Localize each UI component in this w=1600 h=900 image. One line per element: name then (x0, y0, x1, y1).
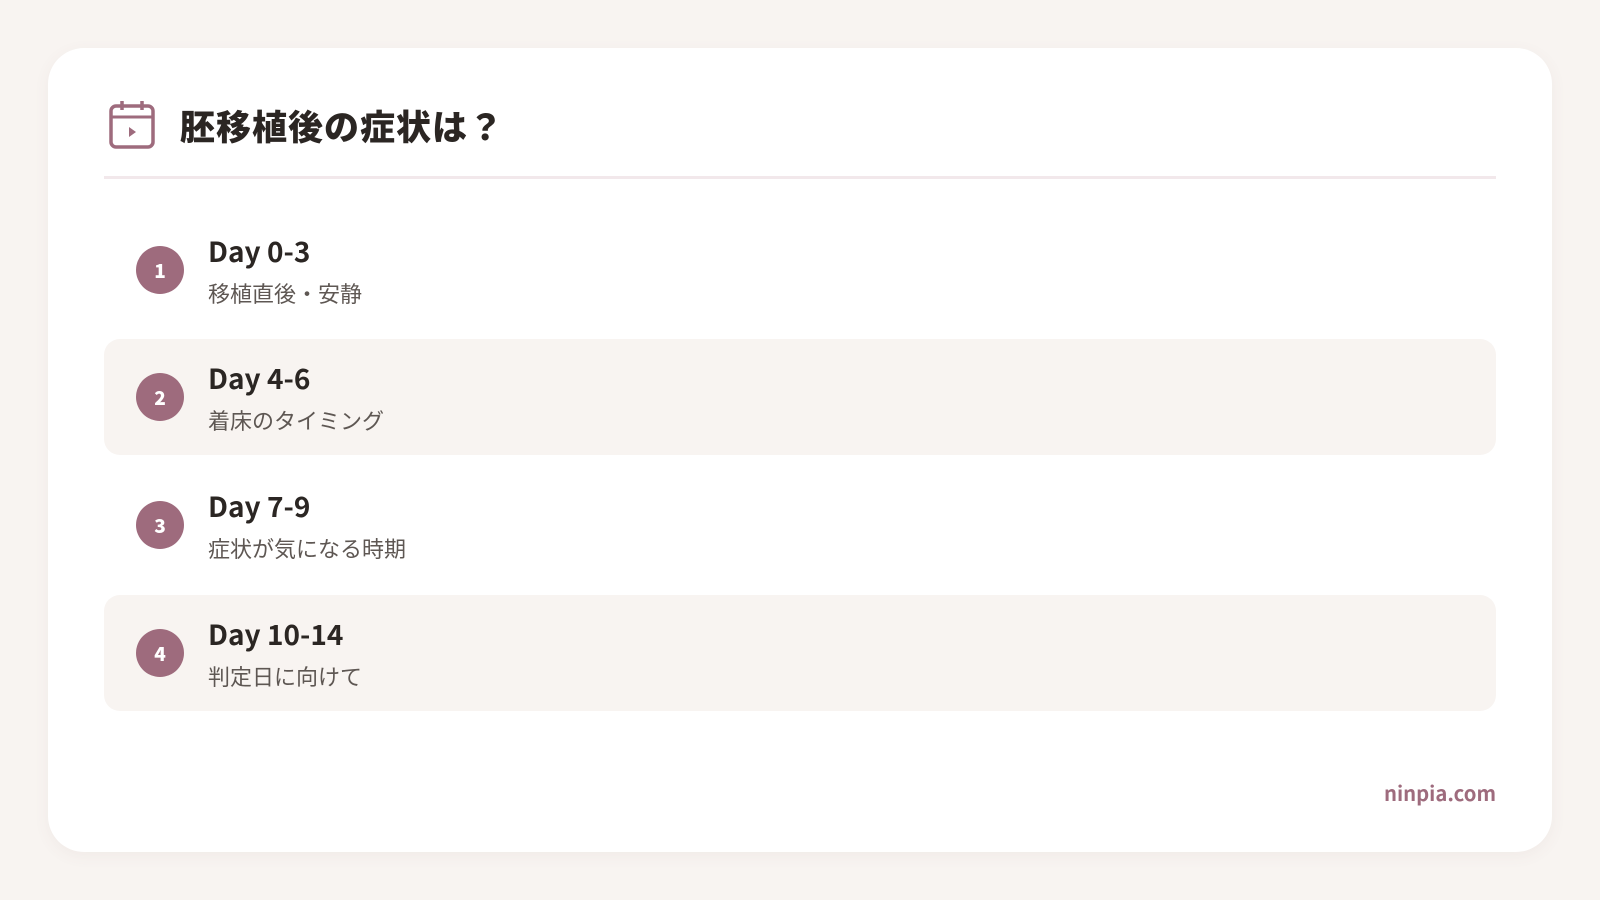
row 1: 1 (154, 256, 166, 284)
title: 胚移植後の症状は？ (180, 100, 504, 150)
footer: source: ninpia.com (1384, 777, 1496, 807)
row 3: Day 7-9 (208, 486, 310, 526)
row 1: Day 0-3 (208, 231, 310, 271)
row 3: 3 (154, 512, 166, 538)
row 2 (104, 339, 1496, 455)
icon: calendar (109, 101, 155, 149)
row 4: 判定日に向けて (208, 660, 362, 692)
row 4: 4 (154, 640, 166, 666)
row 4: Day 10-14 (208, 614, 343, 654)
row 3 (136, 486, 406, 564)
row 2: 2 (154, 384, 166, 410)
row 2: Day 4-6 (208, 358, 310, 398)
row 4 (104, 595, 1496, 711)
row 1: 移植直後・安静 (208, 277, 362, 309)
row 3: 症状が気になる時期 (208, 532, 406, 564)
row 1 (136, 231, 362, 309)
row 2: 着床のタイミング (208, 404, 384, 436)
